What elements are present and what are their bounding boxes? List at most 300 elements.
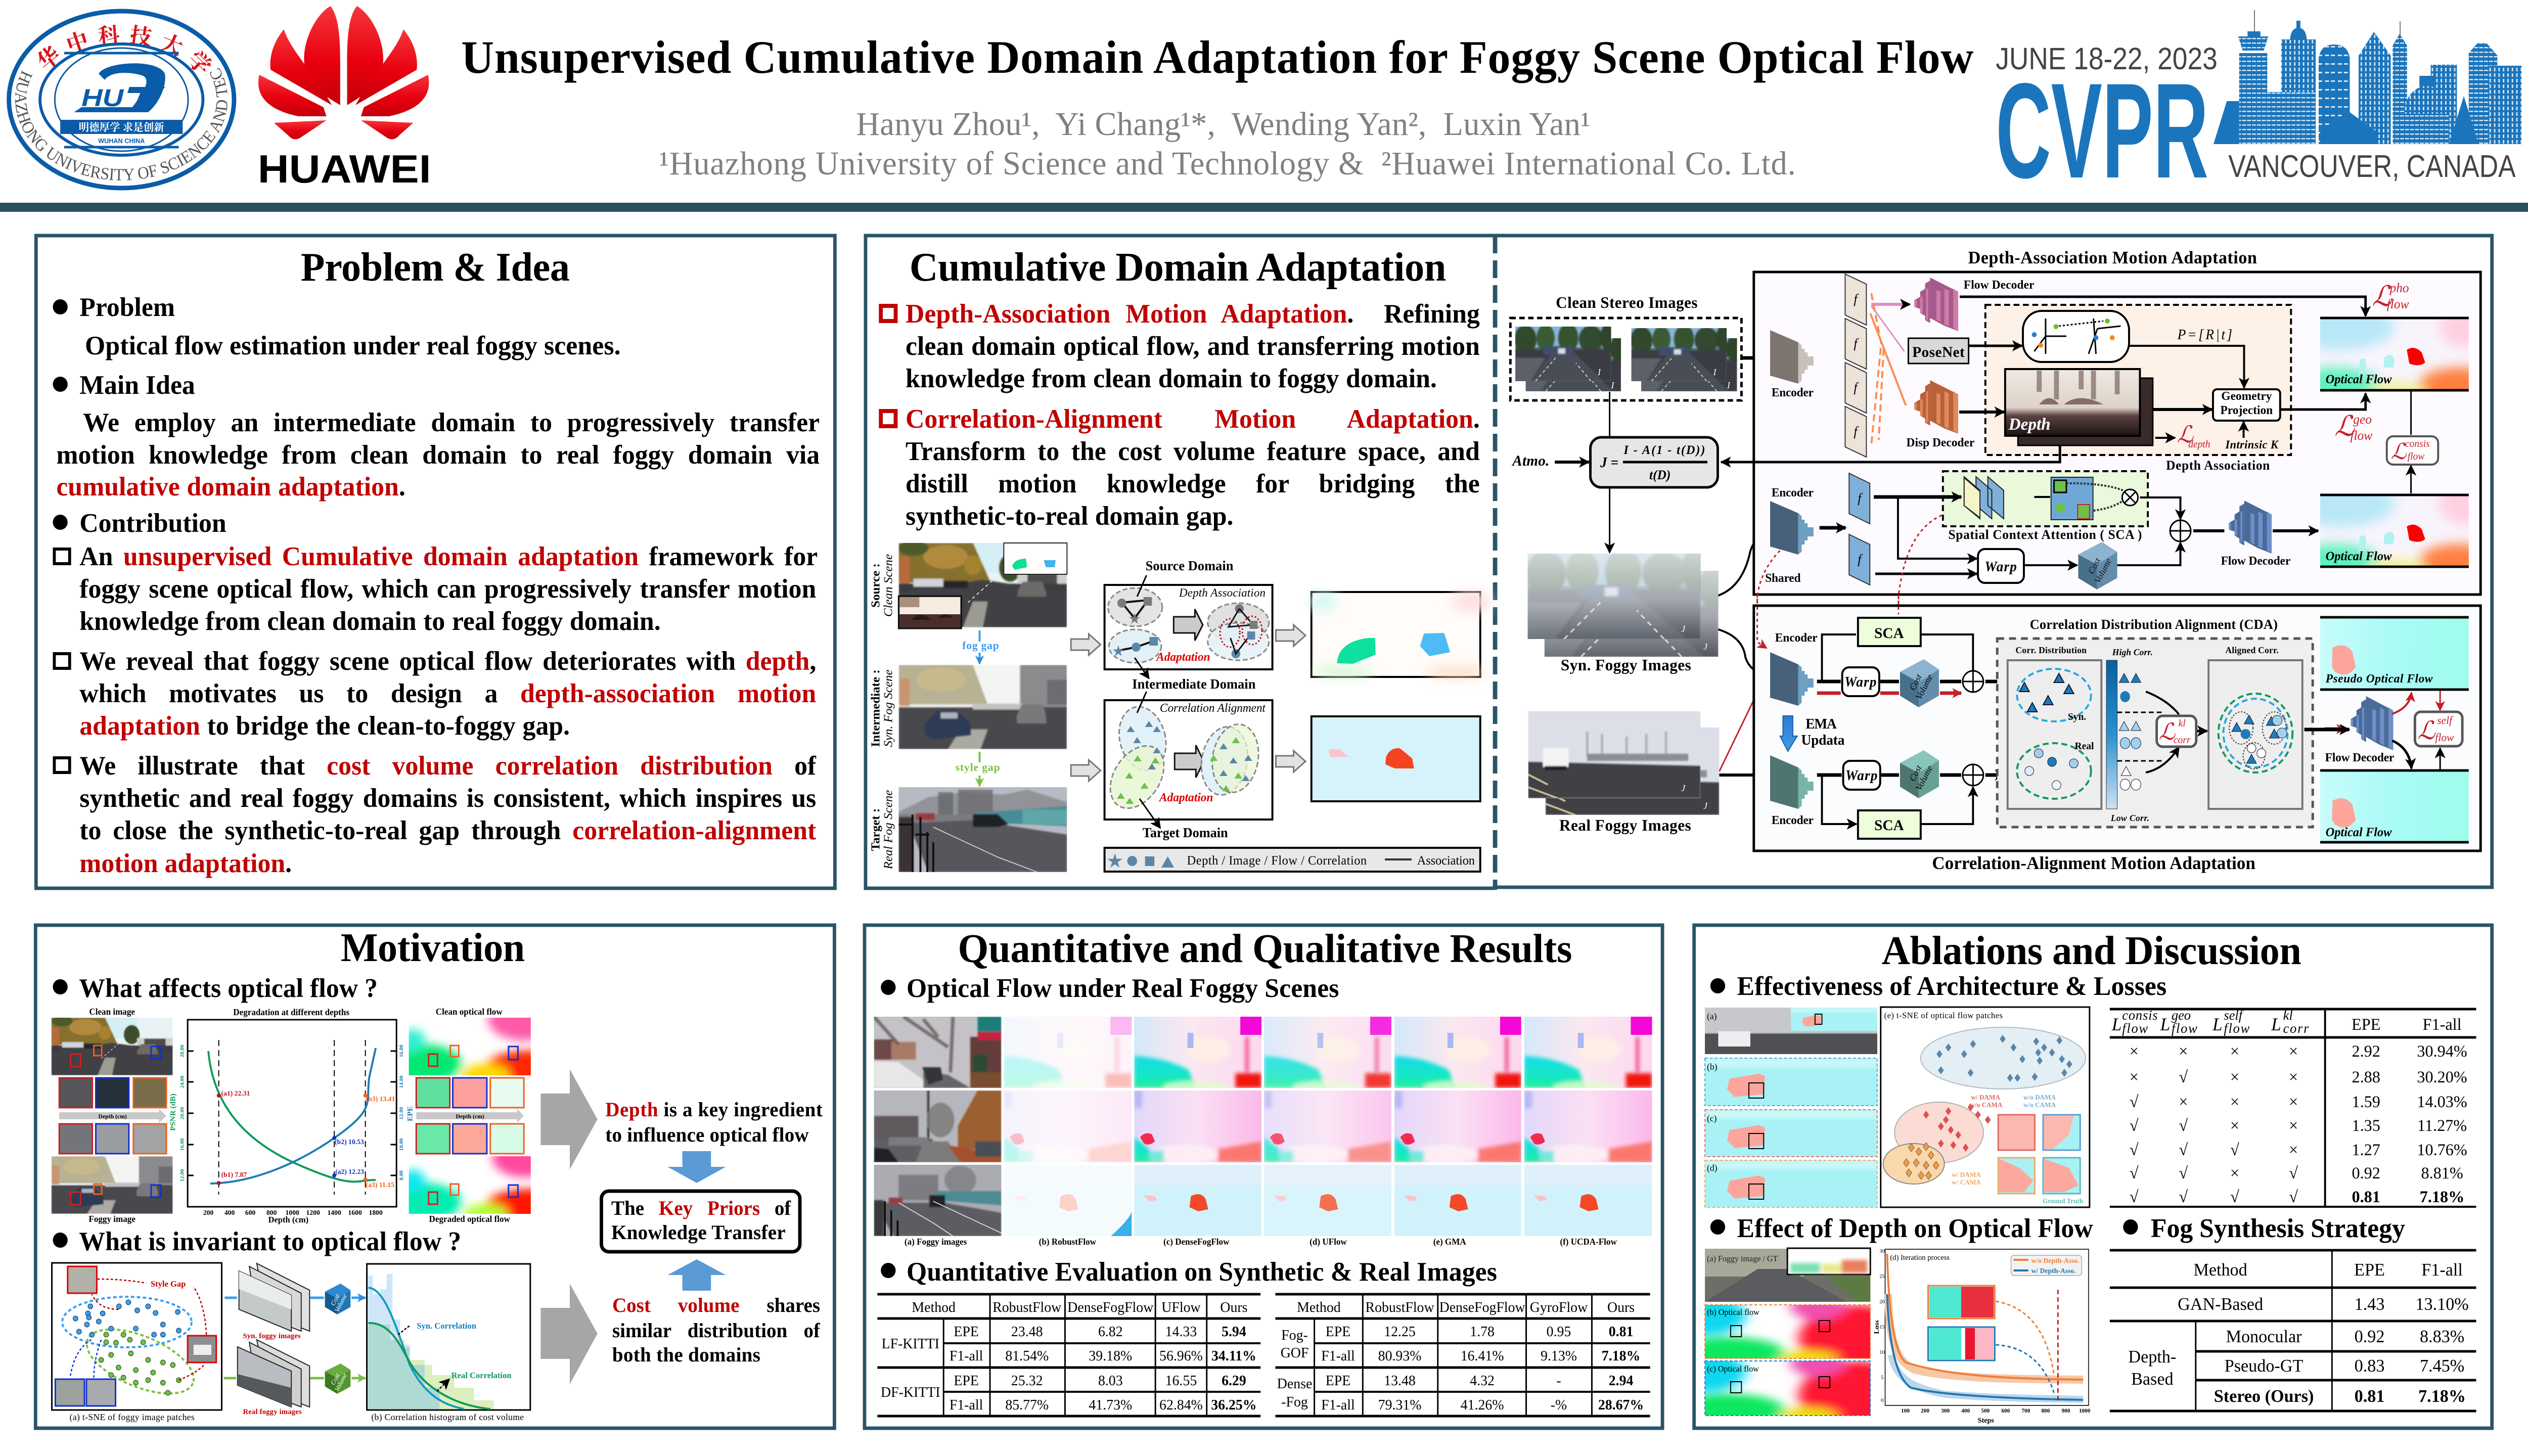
- logo: Huawei: HUAWEI: [258, 147, 431, 191]
- table: fog synthesis strategy: Stereo (Ours): [2214, 1387, 2314, 1406]
- table: ablation results: √: [2130, 1188, 2139, 1206]
- logo: HUST university seal: WUHAN CHINA: [98, 137, 145, 145]
- text block: contribution 2: [54, 645, 816, 742]
- images: real foggy: Real Foggy Images: [1559, 816, 1691, 834]
- loss: self: flow: [2435, 732, 2454, 744]
- table: ablation results: √: [2130, 1093, 2139, 1111]
- table: ablation results: √: [2289, 1164, 2298, 1182]
- figure: optical flow column: Depth (cm): [456, 1113, 484, 1120]
- figure: t-SNE of foggy image patches: (a) t-SNE of foggy image patches: [70, 1412, 195, 1423]
- heading: Cumulative Domain Adaptation: Cumulative Domain Adaptation: [910, 245, 1446, 290]
- diagram: correlation alignment box: Intermediate Domain: [1132, 676, 1256, 692]
- table: Fog-GOF and Dense-Fog: RobustFlow: [1366, 1300, 1434, 1315]
- chart: degradation at different depths: 200: [203, 1209, 213, 1216]
- chart: loss iteration process: 10: [1879, 1349, 1885, 1355]
- table: ablation results: ×: [2230, 1068, 2239, 1086]
- chart: loss iteration process: 0: [1881, 1397, 1884, 1403]
- table: Fog-GOF and Dense-Fog: 28.67%: [1598, 1397, 1644, 1413]
- table: LF-KITTI and DF-KITTI: DF-KITTI: [881, 1385, 940, 1400]
- text block: Problem: Optical flow estimation under real foggy scenes.: [85, 331, 621, 360]
- arrow: motivation lower: [540, 1284, 598, 1384]
- EMA arrow: [1780, 716, 1845, 751]
- table: ablation results: 10.76%: [2417, 1141, 2467, 1159]
- table: ablation results: ×: [2230, 1117, 2239, 1135]
- arrow: motivation upper: [540, 1069, 598, 1169]
- loss: consistency: consis: [2405, 438, 2430, 449]
- text block: contribution 2: We reveal that foggy scene optical flow deteriorates with depth,: [79, 647, 816, 676]
- label: intermediate: Intermediate :: [869, 669, 882, 747]
- chart: loss iteration process: 700: [2021, 1408, 2030, 1414]
- chart: degradation at different depths: 600: [245, 1209, 255, 1216]
- figure: optical flow column: [388, 998, 573, 1227]
- table: Fog-GOF and Dense-Fog: F1-all: [1321, 1397, 1355, 1413]
- diagram: depth-association motion adaptation: Depth Association: [2166, 458, 2270, 473]
- table: fog synthesis strategy: 1.43: [2355, 1295, 2384, 1314]
- chart: degradation at different depths: 1800: [369, 1209, 383, 1216]
- warp and cost volumes: Volume: [1914, 673, 1935, 701]
- table: ablation results: L: [2212, 1014, 2223, 1034]
- encoders and SCA: Encoder: [1772, 814, 1814, 827]
- diagram: domain photos: [869, 540, 1067, 872]
- table: LF-KITTI and DF-KITTI: RobustFlow: [992, 1300, 1062, 1315]
- image grid: qualitative comparison: [874, 1017, 1652, 1236]
- table: ablation results: 1.27: [2352, 1141, 2380, 1159]
- table: ablation results: ×: [2130, 1042, 2139, 1061]
- figure: t-SNE of optical flow patches: w/o DAMA: [2023, 1094, 2056, 1101]
- table: ablation results: flow: [2172, 1021, 2197, 1036]
- chart: correlation histogram: Real Correlation: [452, 1371, 512, 1380]
- callout: depth: to influence optical flow: [605, 1124, 809, 1146]
- callout: cost volume: [612, 1292, 820, 1366]
- callout: depth: Depth is a key ingredient: [605, 1099, 823, 1121]
- figure: t-SNE of optical flow patches: [1881, 1007, 2090, 1207]
- CDA block: Real: [2075, 741, 2094, 752]
- images: real foggy: J: [1681, 783, 1686, 793]
- table: LF-KITTI and DF-KITTI: F1-all: [950, 1348, 983, 1364]
- images: real foggy: [1528, 711, 1719, 834]
- depth association block: [1985, 305, 2291, 455]
- table: LF-KITTI and DF-KITTI: 8.03: [1098, 1373, 1123, 1389]
- images: clean stereo pair: I: [1713, 367, 1717, 377]
- table: LF-KITTI and DF-KITTI: UFlow: [1161, 1300, 1201, 1315]
- chart: degradation at different depths: 1000: [285, 1209, 299, 1216]
- depth association block: Geometry: [2221, 390, 2272, 403]
- arrow: fog gap: [962, 630, 999, 664]
- loss: photometric: ℒ: [2372, 281, 2392, 312]
- table: ablation results: L: [2271, 1014, 2281, 1034]
- diagram: depth-association motion adaptation: Spatial Context Attention ( SCA ): [1949, 527, 2142, 542]
- table: ablation results: flow: [2224, 1021, 2249, 1036]
- figure: architecture comparison images: (b): [1707, 1062, 1718, 1072]
- feature planes: f: [1854, 380, 1859, 395]
- table: ablation results: corr: [2283, 1021, 2309, 1036]
- table: LF-KITTI and DF-KITTI: 23.48: [1011, 1324, 1043, 1340]
- images: clean stereo pair: I: [1611, 380, 1614, 390]
- table: ablation results: √: [2179, 1141, 2188, 1159]
- heading: results: Quantitative and Qualitative Results: [958, 927, 1572, 971]
- figure: architecture comparison images: [1705, 1008, 1877, 1207]
- figure: clean and foggy image column: [52, 1007, 173, 1224]
- captions: qualitative comparison: [905, 1237, 1617, 1247]
- table: Fog-GOF and Dense-Fog: Ours: [1607, 1300, 1635, 1315]
- label: source clean scene: Clean Scene: [882, 554, 895, 617]
- chart: degradation at different depths: 16.00: [398, 1044, 404, 1057]
- diagram: correlation alignment box: Correlation Alignment: [1160, 702, 1266, 715]
- chart: degradation at different depths: 16.00: [179, 1138, 185, 1151]
- table: ablation results: ×: [2130, 1068, 2139, 1086]
- table: LF-KITTI and DF-KITTI: [877, 1294, 1260, 1416]
- diagram: correlation alignment box: Target Domain: [1143, 825, 1228, 840]
- table: ablation results: 7.18%: [2420, 1188, 2464, 1206]
- callout: key priors: The Key Priors of: [611, 1197, 791, 1219]
- table: LF-KITTI and DF-KITTI: 39.18%: [1089, 1348, 1132, 1364]
- figure: t-SNE of foggy image patches: [52, 1263, 221, 1423]
- table: ablation results: self: [2224, 1008, 2244, 1023]
- heading: quantitative evaluation: Quantitative Evaluation on Synthetic & Real Images: [907, 1257, 1497, 1287]
- affiliations: ¹Huazhong University of Science and Technology & ²Huawei International Co. Ltd.: [659, 145, 1796, 182]
- diagram: depth association box: ★: [1128, 613, 1141, 626]
- flow result: target: [1312, 716, 1480, 801]
- table: ablation results: √: [2230, 1141, 2239, 1159]
- logo: HUST university seal: HU: [81, 85, 124, 112]
- captions: qualitative comparison: (c) DenseFogFlow: [1163, 1237, 1230, 1247]
- images: clean stereo pair: [1510, 318, 1743, 400]
- table: ablation results: √: [2179, 1164, 2188, 1182]
- text block: contribution 1: knowledge from clean domain to real foggy domain.: [79, 607, 661, 636]
- text block: correlation-alignment summary: distill motion knowledge for bridging the: [906, 469, 1480, 498]
- chart: correlation histogram: Syn. Correlation: [417, 1321, 477, 1331]
- table: fog synthesis strategy: 0.81: [2355, 1387, 2384, 1406]
- figure: t-SNE of optical flow patches: w/o CAMA: [1970, 1101, 2003, 1109]
- text block: Main Idea: cumulative domain adaptation.: [56, 472, 405, 502]
- table: Fog-GOF and Dense-Fog: EPE: [1326, 1373, 1350, 1389]
- arrow: up to key priors: [667, 1259, 726, 1291]
- warp and cost volumes: Cost: [1907, 672, 1924, 692]
- table: ablation results: EPE: [2352, 1016, 2380, 1034]
- diagram: depth association box: Source Domain: [1146, 558, 1234, 573]
- header: [0, 6, 2528, 212]
- shared encoder: Encoder: [1772, 486, 1814, 499]
- title: Unsupervised Cumulative Domain Adaptation for Foggy Scene Optical Flow: [461, 31, 1974, 83]
- arrow: style gap: [956, 752, 1000, 786]
- table: Fog-GOF and Dense-Fog: DenseFogFlow: [1439, 1300, 1525, 1315]
- table: ablation results: 2.88: [2352, 1068, 2380, 1086]
- text block: Main Idea: We employ an intermediate domain to progressively transfer: [83, 408, 820, 437]
- captions: qualitative comparison: (b) RobustFlow: [1039, 1237, 1097, 1247]
- pseudo optical flow: Pseudo Optical Flow: [2325, 672, 2433, 686]
- table: Fog-GOF and Dense-Fog: GOF: [1281, 1345, 1308, 1361]
- table: fog synthesis strategy: 7.18%: [2418, 1387, 2466, 1406]
- figure: clean and foggy image column: Clean image: [89, 1007, 135, 1017]
- text block: contribution 2: which motivates us to design a depth-association motion: [79, 679, 816, 708]
- callout: depth: [605, 1099, 823, 1146]
- table: ablation results: 8.81%: [2421, 1164, 2463, 1182]
- logo: HUST university seal: 明德厚学 求是创新: [79, 122, 164, 133]
- CDA block: kl: [2179, 718, 2186, 729]
- arrows: shared branch: [1820, 497, 2318, 574]
- figure: depth effect images: [1663, 1248, 1914, 1430]
- CDA block: Low Corr.: [2110, 813, 2149, 823]
- photo: intermediate synthetic fog: [898, 665, 1067, 749]
- chart: degradation at different depths: 12.00: [398, 1107, 404, 1119]
- flow decoder blue: [2221, 500, 2291, 568]
- arrows: input flow: [1555, 358, 1842, 775]
- disp decoder: Disp Decoder: [1907, 436, 1975, 449]
- formula box: t(D): [1649, 468, 1671, 482]
- chart: loss iteration process: w/o Depth-Asso.: [2032, 1257, 2079, 1264]
- flow result: source: [1308, 592, 1491, 677]
- table: ablation results: √: [2230, 1188, 2239, 1206]
- flow decoder blue: Flow Decoder: [2221, 555, 2291, 568]
- figure: foggy image stacks and cost volumes: Volume: [333, 1293, 348, 1313]
- posenet: [1908, 338, 1969, 363]
- CDA block: ℒ: [2159, 719, 2176, 745]
- loss: geometry: [2334, 411, 2372, 443]
- table: ablation results: ×: [2230, 1093, 2239, 1111]
- arrows: depth branch: [1721, 297, 2411, 493]
- encoder: [1770, 330, 1814, 399]
- depth association block: P = [ R | t ]: [2177, 327, 2232, 342]
- figure: foggy image stacks and cost volumes: Syn. foggy images: [243, 1332, 301, 1340]
- heading: effect of depth: Effect of Depth on Optical Flow: [1737, 1213, 2093, 1243]
- text block: correlation-alignment summary: Transform to the cost volume feature space, and: [906, 437, 1480, 466]
- diagram: depth association box: [1105, 558, 1273, 678]
- photo: target real fog: [898, 787, 1067, 872]
- formula box: J =: [1600, 454, 1618, 470]
- table: ablation results: kl: [2283, 1008, 2293, 1023]
- arrows: CDA branches: [1757, 595, 2005, 824]
- figure: architecture comparison images: (a): [1707, 1011, 1717, 1022]
- diagram: depth-association motion adaptation: Depth-Association Motion Adaptation: [1968, 248, 2257, 267]
- table: LF-KITTI and DF-KITTI: F1-all: [950, 1397, 983, 1413]
- label: target: Real Fog Scene: [882, 790, 895, 870]
- figure: depth effect images: (a) Foggy image / GT: [1707, 1254, 1778, 1263]
- legend: ★: [1107, 852, 1123, 870]
- CDA block: [1997, 617, 2313, 827]
- posenet: PoseNet: [1912, 344, 1965, 360]
- table: LF-KITTI and DF-KITTI: 16.55: [1165, 1373, 1197, 1389]
- heading: Problem & Idea: Problem & Idea: [301, 245, 570, 290]
- diagram: depth association box: Adaptation: [1155, 651, 1210, 664]
- table: LF-KITTI and DF-KITTI: 62.84%: [1159, 1397, 1203, 1413]
- chart: degradation at different depths: EPE: [406, 1106, 414, 1121]
- text block: contribution 3: synthetic and real foggy domains is consistent, which inspires us: [79, 784, 816, 813]
- diagram: correlation-alignment motion adaptation: [1754, 595, 2480, 873]
- table: LF-KITTI and DF-KITTI: 6.82: [1098, 1324, 1123, 1340]
- table: LF-KITTI and DF-KITTI: 5.94: [1222, 1324, 1246, 1340]
- label: intermediate: [869, 669, 895, 747]
- authors: Hanyu Zhou¹, Yi Chang¹*, Wending Yan², Luxin Yan¹: [856, 106, 1591, 143]
- table: ablation results: 1.59: [2352, 1093, 2380, 1111]
- callout: cost volume: similar distribution of: [612, 1319, 820, 1342]
- text block: correlation-alignment summary: synthetic-to-real domain gap.: [906, 502, 1233, 531]
- figure: t-SNE of optical flow patches: w/ DAMA: [1971, 1094, 2000, 1101]
- table: fog synthesis strategy: GAN-Based: [2178, 1295, 2263, 1314]
- legend: [1105, 848, 1480, 872]
- table: ablation results: ×: [2230, 1164, 2239, 1182]
- sca module: [1943, 471, 2148, 526]
- CDA block: corr: [2174, 735, 2191, 746]
- chart: loss iteration process: (d) Iteration process: [1890, 1254, 1950, 1262]
- diagram: framework left inputs: [1510, 294, 1842, 834]
- loss: consistency: ℒ: [2391, 440, 2407, 464]
- optical flow output 1: Optical Flow: [2326, 373, 2392, 386]
- table: ablation results: 2.92: [2352, 1042, 2380, 1061]
- table: Fog-GOF and Dense-Fog: 0.81: [1609, 1324, 1633, 1340]
- loss: self: [2415, 712, 2462, 746]
- captions: qualitative comparison: (a) Foggy images: [905, 1237, 967, 1247]
- table: fog synthesis strategy: F1-all: [2421, 1260, 2463, 1280]
- table: ablation results: L: [2111, 1014, 2121, 1034]
- table: Fog-GOF and Dense-Fog: -Fog: [1281, 1394, 1308, 1410]
- chart: loss iteration process: 1000: [2079, 1408, 2091, 1414]
- panel: Problem & Idea: [36, 236, 835, 888]
- text block: Main Idea: motion knowledge from clean domain to real foggy domain via: [56, 440, 820, 470]
- flow decoder: [1914, 278, 2035, 331]
- chart: degradation at different depths: (a1) 22.31: [221, 1089, 250, 1098]
- images: clean stereo pair: I: [1597, 367, 1601, 377]
- cost volume: Volume: [2092, 557, 2113, 585]
- text block: contribution 3: to close the synthetic-to-real gap through correlation-alignment: [79, 816, 816, 845]
- chart: degradation at different depths: 20.00: [179, 1107, 185, 1119]
- chart: degradation at different depths: 10.00: [398, 1138, 404, 1151]
- table: LF-KITTI and DF-KITTI: 36.25%: [1211, 1397, 1257, 1413]
- chart: correlation histogram: [367, 1264, 530, 1423]
- chart: correlation histogram: (b) Correlation histogram of cost volume: [371, 1412, 524, 1423]
- table: ablation results: L: [2159, 1014, 2170, 1034]
- table: LF-KITTI and DF-KITTI: 41.73%: [1089, 1397, 1132, 1413]
- chart: loss iteration process: 900: [2062, 1408, 2070, 1414]
- figure: depth effect images: (b) Optical flow: [1707, 1307, 1759, 1317]
- label: target: [869, 790, 895, 870]
- figure: t-SNE of optical flow patches: Ground Truth: [2043, 1197, 2084, 1205]
- table: LF-KITTI and DF-KITTI: 14.33: [1165, 1324, 1197, 1340]
- logo: HUST university seal: 华中科技大学: [38, 24, 212, 72]
- table: Fog-GOF and Dense-Fog: 0.95: [1547, 1324, 1571, 1340]
- legend: Depth / Image / Flow / Correlation: [1187, 854, 1367, 868]
- figure: clean and foggy image column: Foggy image: [88, 1214, 136, 1224]
- cost volume: Cost: [2086, 556, 2103, 576]
- figure: optical flow column: Degraded optical flow: [429, 1214, 510, 1224]
- chart: loss iteration process: 100: [1901, 1408, 1910, 1414]
- diagram: correlation alignment box: Adaptation: [1158, 791, 1213, 804]
- encoders and SCA: Encoder: [1775, 631, 1818, 645]
- table: fog synthesis strategy: 8.83%: [2420, 1327, 2464, 1346]
- chart: loss iteration process: 15: [1879, 1324, 1885, 1330]
- captions: qualitative comparison: (d) UFlow: [1310, 1237, 1347, 1247]
- chart: loss iteration process: 400: [1961, 1408, 1970, 1414]
- table: LF-KITTI and DF-KITTI: 6.29: [1222, 1373, 1246, 1389]
- blue feature planes: f: [1858, 552, 1863, 567]
- figure: clean and foggy image column: Depth (cm): [99, 1113, 127, 1120]
- table: ablation results: ×: [2230, 1042, 2239, 1061]
- text block: contribution 2: adaptation to bridge the clean-to-foggy gap.: [79, 711, 570, 741]
- table: ablation results: √: [2179, 1117, 2188, 1135]
- table: ablation results: √: [2130, 1164, 2139, 1182]
- diagram: depth association box: ★: [1112, 645, 1124, 658]
- callout: key priors: [601, 1191, 800, 1252]
- table: Fog-GOF and Dense-Fog: F1-all: [1321, 1348, 1355, 1364]
- depth association block: Projection: [2221, 404, 2273, 417]
- table: fog synthesis strategy: 0.83: [2355, 1356, 2384, 1376]
- figure: t-SNE of optical flow patches: w/ CAMA: [1952, 1178, 1981, 1186]
- table: fog synthesis strategy: Based: [2131, 1370, 2174, 1389]
- cost volume: [2078, 542, 2117, 589]
- dotted links: [1757, 515, 1942, 648]
- chart: loss iteration process: 30: [1879, 1248, 1885, 1254]
- table: ablation results: F1-all: [2423, 1016, 2462, 1034]
- legend: Association: [1417, 854, 1475, 868]
- optical flow: [2320, 769, 2469, 843]
- table: Fog-GOF and Dense-Fog: 80.93%: [1378, 1348, 1421, 1364]
- optical flow output 2: Optical Flow: [2326, 550, 2392, 563]
- table: ablation results: [2110, 1008, 2476, 1207]
- chart: degradation at different depths: 12.00: [179, 1169, 185, 1181]
- table: ablation results: √: [2289, 1188, 2298, 1206]
- flow decoder: Flow Decoder: [1964, 279, 2035, 292]
- table: ablation results: ×: [2179, 1093, 2188, 1111]
- encoder: Encoder: [1772, 386, 1814, 399]
- diagram: depth-association motion adaptation: [1721, 248, 2499, 648]
- warp and cost volumes: Cost: [1907, 763, 1924, 783]
- images: synthetic foggy: J: [1703, 642, 1708, 652]
- figure: architecture comparison images: (c): [1707, 1113, 1717, 1124]
- chart: loss iteration process: 800: [2041, 1408, 2050, 1414]
- table: fog synthesis strategy: Monocular: [2226, 1327, 2302, 1346]
- table: Fog-GOF and Dense-Fog: EPE: [1326, 1324, 1350, 1340]
- table: ablation results: flow: [2122, 1021, 2148, 1036]
- figure: t-SNE of foggy image patches: Style Gap: [151, 1279, 186, 1289]
- panel: Motivation: [35, 925, 834, 1428]
- callout: cost volume: both the domains: [612, 1344, 760, 1366]
- chart: degradation at different depths: (b3) 13.41: [366, 1095, 395, 1103]
- loss: consistency: [2387, 436, 2438, 465]
- heading: Motivation: Motivation: [341, 926, 525, 970]
- chart: degradation at different depths: 1600: [348, 1209, 362, 1216]
- chart: degradation at different depths: Degradation at different depths: [233, 1008, 349, 1017]
- text block: depth-association summary: [881, 298, 1480, 395]
- text block: depth-association summary: Depth-Association Motion Adaptation. Refining: [906, 299, 1480, 329]
- chart: degradation at different depths: (a2) 12.23: [335, 1168, 364, 1176]
- text block: depth-association summary: knowledge from clean domain to foggy domain.: [906, 364, 1437, 393]
- CDA block: High Corr.: [2112, 647, 2153, 657]
- figure: architecture comparison images: (d): [1707, 1163, 1718, 1173]
- text block: contribution 1: [54, 540, 818, 638]
- text block: Problem: Problem: [79, 292, 175, 322]
- table: Fog-GOF and Dense-Fog: 1.78: [1470, 1324, 1495, 1340]
- loss: photometric: pho: [2389, 281, 2409, 295]
- chart: degradation at different depths: [169, 1008, 414, 1224]
- table: LF-KITTI and DF-KITTI: EPE: [954, 1373, 979, 1389]
- table: ablation results: 11.27%: [2417, 1117, 2467, 1135]
- table: ablation results: 30.94%: [2417, 1042, 2467, 1061]
- table: Fog-GOF and Dense-Fog: GyroFlow: [1530, 1300, 1588, 1315]
- text block: depth-association summary: clean domain optical flow, and transferring motion: [906, 332, 1480, 361]
- EMA arrow: Updata: [1801, 732, 1845, 748]
- table: Fog-GOF and Dense-Fog: Method: [1297, 1300, 1341, 1315]
- callout: key priors: Knowledge Transfer: [611, 1221, 786, 1244]
- chart: loss iteration process: Steps: [1978, 1417, 1994, 1425]
- table: Fog-GOF and Dense-Fog: 79.31%: [1378, 1397, 1421, 1413]
- arrows: images to domains: [1071, 625, 1305, 781]
- table: ablation results: ×: [2289, 1068, 2298, 1086]
- table: ablation results: geo: [2172, 1008, 2191, 1023]
- warp and cost volumes: Warp: [1844, 674, 1876, 690]
- blue feature planes: [1849, 473, 1870, 585]
- arrows: features to decoders: [1870, 293, 1910, 445]
- header band: [0, 203, 2528, 212]
- table: fog synthesis strategy: 7.45%: [2420, 1356, 2464, 1376]
